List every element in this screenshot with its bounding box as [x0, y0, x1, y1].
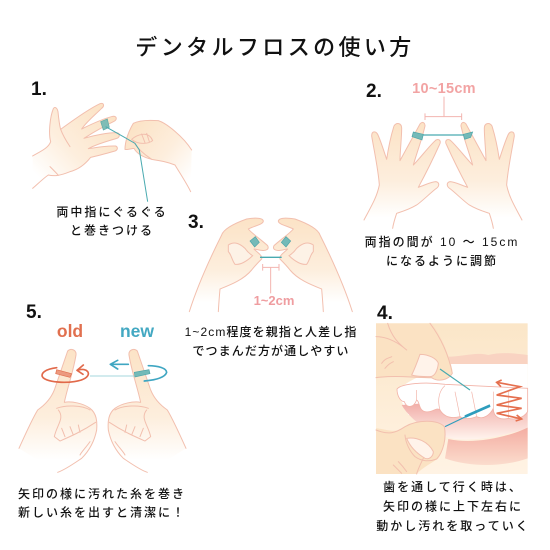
gum	[402, 395, 528, 440]
floss	[440, 369, 470, 390]
caption 4: 動かし汚れを取っていく	[376, 518, 530, 533]
right curled fingers	[289, 243, 313, 264]
panel: step 2	[364, 81, 522, 268]
illustration: flossing teeth	[376, 323, 528, 474]
caption 2: 両指の間が 10 ～ 15cm	[365, 235, 519, 249]
background skin	[376, 323, 528, 474]
mouth white area	[397, 364, 528, 415]
right hand	[125, 120, 192, 192]
right hand	[446, 122, 522, 228]
step number 4: 4.	[377, 303, 393, 324]
illustration: pinching fingers	[189, 218, 352, 312]
floss thread	[418, 133, 468, 137]
caption 3: でつまんだ方が通しやすい	[192, 343, 350, 358]
left thumb hand	[19, 349, 97, 472]
old rotating arrow	[42, 365, 88, 382]
measurement bracket	[425, 97, 462, 120]
finger rings	[250, 237, 259, 247]
zigzag arrow	[497, 382, 522, 419]
label new: new	[120, 321, 154, 341]
connecting thread	[90, 374, 135, 377]
lower fingernail	[407, 438, 433, 459]
old floss ring	[56, 370, 72, 377]
caption 5: 新しい糸を出すと清潔に！	[18, 504, 186, 520]
left hand	[189, 218, 268, 312]
caption 4: 歯を通して行く時は、	[383, 480, 523, 494]
upper finger	[376, 323, 452, 380]
upper lip	[447, 353, 528, 365]
title: デンタルフロスの使い方	[135, 35, 415, 60]
illustration: thumbs winding floss	[19, 349, 186, 472]
measurement label 10~15cm: 10~15cm	[412, 81, 476, 97]
floss thread	[106, 127, 148, 202]
caption 5: 矢印の様に汚れた糸を巻き	[18, 487, 186, 501]
caption 2: になるように調節	[386, 253, 498, 268]
illustration: wrapping floss around middle fingers	[33, 103, 192, 202]
new arrow	[144, 366, 167, 381]
step number 1: 1.	[31, 79, 47, 100]
label old: old	[57, 321, 83, 341]
illustration: hands and measurement	[364, 97, 522, 228]
step number 2: 2.	[366, 81, 382, 102]
caption 3: 1~2cm程度を親指と人差し指	[185, 325, 357, 339]
measurement bracket	[263, 264, 279, 293]
panel: step 3	[185, 212, 357, 358]
panel: step 1	[31, 79, 192, 238]
floss ring	[101, 119, 109, 130]
caption 4: 矢印の様に上下左右に	[383, 498, 523, 514]
finger rings	[412, 132, 423, 140]
left curled fingers	[228, 243, 253, 264]
step number 5: 5.	[26, 302, 42, 323]
step number 3: 3.	[188, 212, 204, 233]
caption 1: と巻きつける	[70, 222, 154, 238]
lower lip	[445, 428, 528, 465]
left hand	[364, 122, 440, 228]
measurement label 1~2cm: 1~2cm	[254, 293, 294, 308]
caption 1: 両中指にぐるぐる	[56, 205, 168, 219]
new floss ring	[134, 370, 150, 377]
lower thumb	[376, 422, 445, 474]
panel: step 5	[18, 302, 186, 520]
right hand	[273, 218, 352, 312]
panel: step 4	[376, 303, 530, 533]
floss thread	[260, 255, 282, 259]
upper fingernail	[412, 354, 438, 377]
teeth	[397, 383, 528, 419]
right thumb hand	[108, 349, 186, 472]
